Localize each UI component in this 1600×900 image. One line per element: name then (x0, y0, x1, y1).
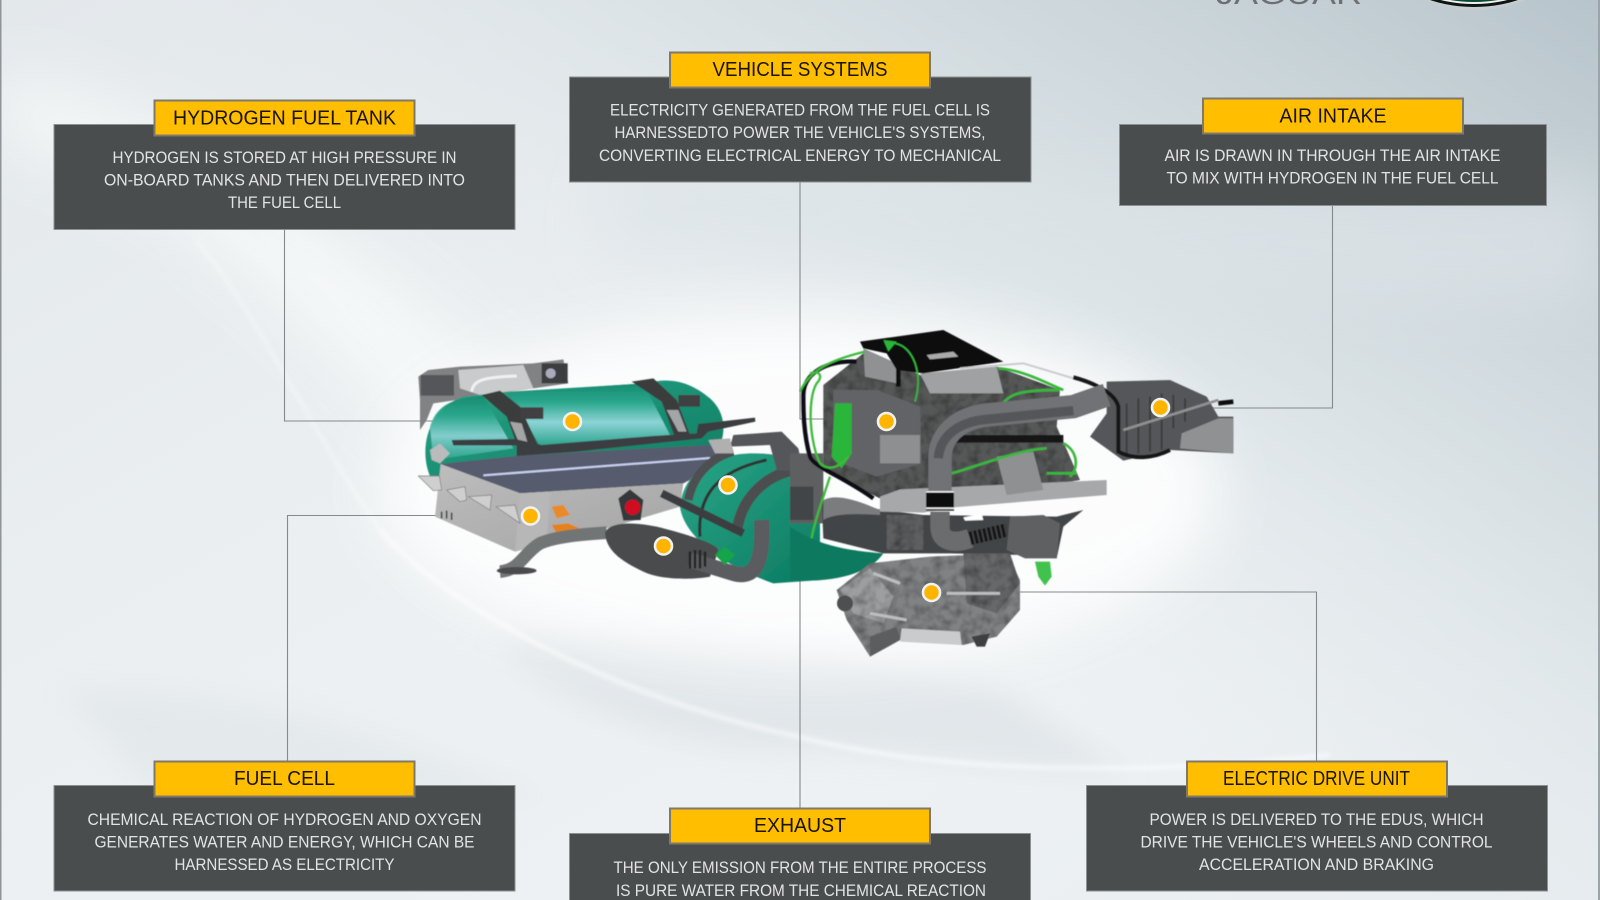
illustration: hydrogen fuel cell powertrain (418, 330, 1233, 657)
panel: air intake: AIR INTAKE (1280, 104, 1386, 128)
panel: hydrogen fuel tank: HYDROGEN FUEL TANK (173, 106, 396, 130)
marker: vehicle systems (878, 413, 895, 430)
panel: hydrogen fuel tank: HYDROGEN IS STORED AT HIGH PRESSURE IN (112, 149, 456, 167)
marker: exhaust (655, 538, 672, 554)
marker: hydrogen fuel tank (564, 413, 581, 430)
marker: air intake (1152, 399, 1169, 416)
marker: second hydrogen tank (720, 476, 736, 494)
marker: fuel cell (522, 508, 539, 524)
panel: air intake: AIR IS DRAWN IN THROUGH THE AIR INTAKE (1164, 147, 1500, 165)
panel: electric drive unit: ELECTRIC DRIVE UNIT (1223, 767, 1410, 790)
panel: fuel cell: CHEMICAL REACTION OF HYDROGEN AND OXYGEN (88, 811, 482, 829)
panel: vehicle systems: CONVERTING ELECTRICAL ENERGY TO MECHANICAL (599, 147, 1001, 165)
panel: air intake: TO MIX WITH HYDROGEN IN THE FUEL CELL (1166, 170, 1498, 188)
panel: electric drive unit: ACCELERATION AND BRAKING (1199, 856, 1434, 874)
panel: electric drive unit (1086, 762, 1548, 891)
logo: Land Rover oval badge (1396, 0, 1552, 10)
part: engine block, air intake and electric drive unit (790, 330, 1233, 657)
panel: exhaust: THE ONLY EMISSION FROM THE ENTIRE PROCESS (614, 859, 986, 877)
marker: electric drive unit (923, 584, 940, 601)
panel: fuel cell: GENERATES WATER AND ENERGY, WHICH CAN BE (94, 834, 474, 852)
panel: hydrogen fuel tank: ON-BOARD TANKS AND THEN DELIVERED INTO (104, 172, 465, 190)
panel: air intake (1120, 98, 1546, 206)
panel: exhaust: EXHAUST (754, 814, 846, 837)
panel: fuel cell (54, 762, 515, 891)
panel: exhaust: IS PURE WATER FROM THE CHEMICAL REACTION (616, 882, 986, 900)
panel: exhaust (570, 808, 1030, 900)
part: rear hydrogen tank, fuel cell box and exhaust (418, 359, 820, 583)
panel: vehicle systems (570, 52, 1031, 182)
panel: electric drive unit: DRIVE THE VEHICLE'S WHEELS AND CONTROL (1140, 834, 1492, 852)
panel: fuel cell: FUEL CELL (234, 767, 335, 790)
panel: hydrogen fuel tank (54, 100, 515, 230)
panel: electric drive unit: POWER IS DELIVERED TO THE EDUS, WHICH (1150, 811, 1484, 829)
panel: vehicle systems: ELECTRICITY GENERATED FROM THE FUEL CELL IS (610, 102, 990, 120)
panel: vehicle systems: VEHICLE SYSTEMS (712, 58, 888, 81)
panel: fuel cell: HARNESSED AS ELECTRICITY (174, 856, 394, 874)
panel: hydrogen fuel tank: THE FUEL CELL (228, 194, 341, 212)
panel: vehicle systems: HARNESSEDTO POWER THE VEHICLE'S SYSTEMS, (614, 124, 986, 142)
leader lines (284, 182, 1332, 808)
